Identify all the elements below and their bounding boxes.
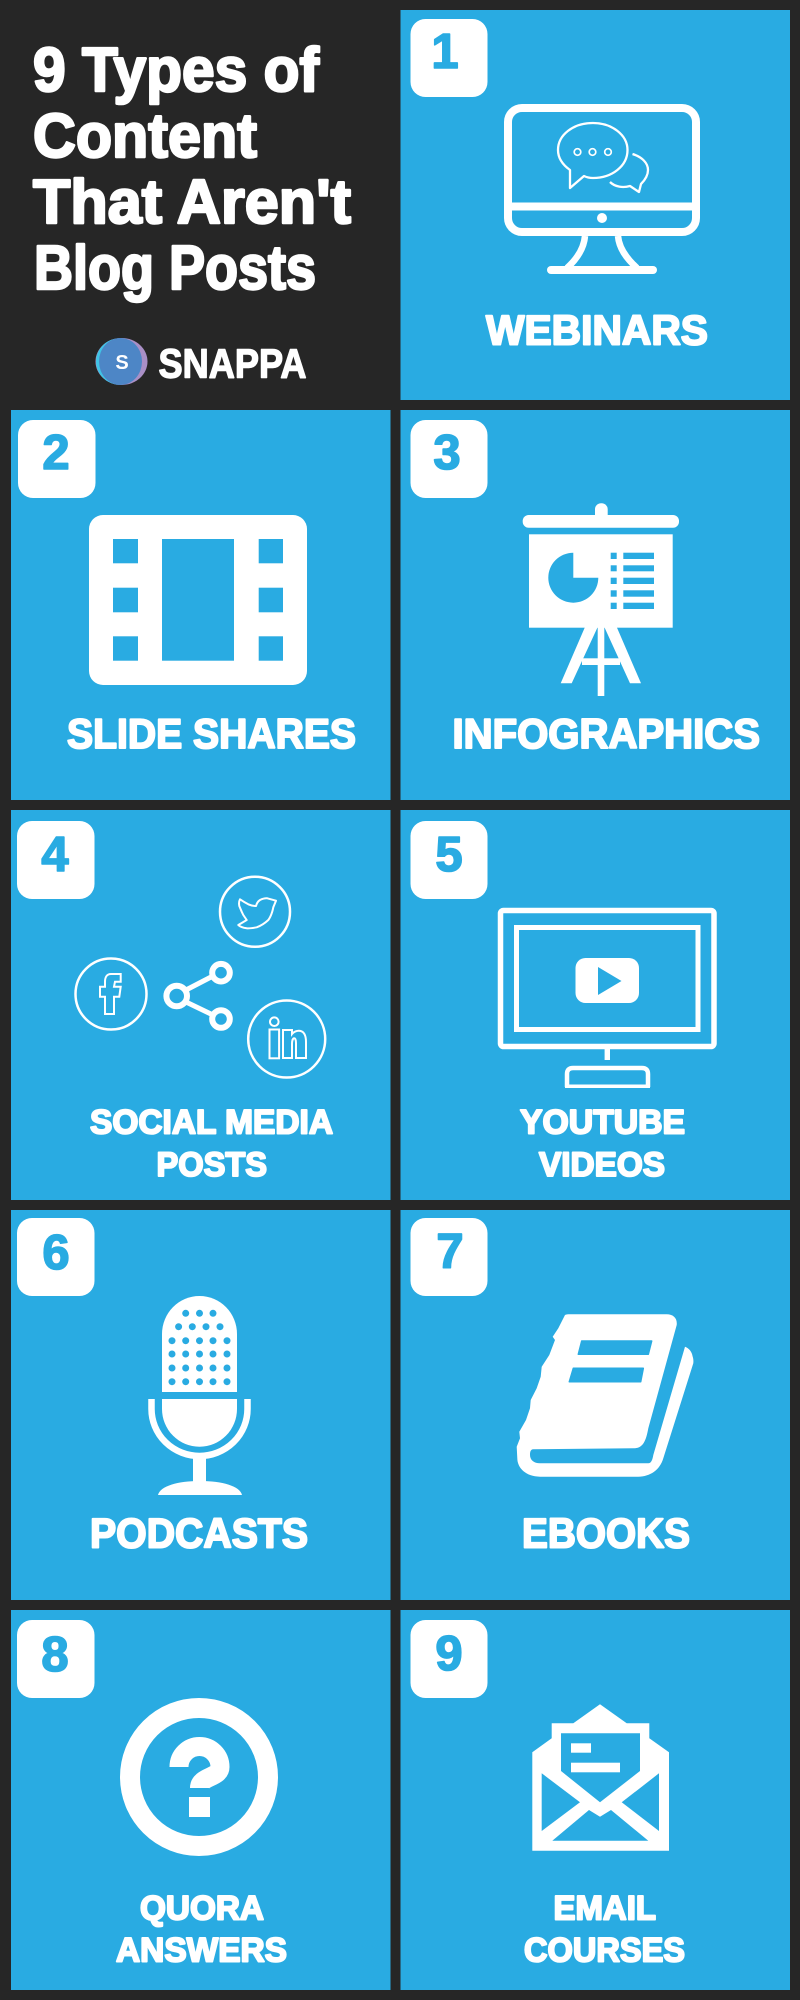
label: email courses (524, 1890, 685, 1970)
icon: facebook circle (76, 958, 146, 1030)
label: quora answers: ANSWERS (116, 1932, 287, 1970)
label: slide shares: SLIDE SHARES (67, 710, 356, 757)
label: email courses: COURSES (524, 1932, 685, 1970)
badge: 5: 5 (435, 828, 463, 882)
label: quora answers (116, 1890, 287, 1970)
badge: 2: 2 (42, 426, 70, 480)
label: youtube videos: YOUTUBE (520, 1104, 685, 1142)
icon: question mark circle (130, 1708, 268, 1846)
label: youtube videos (520, 1104, 685, 1184)
label: email courses: EMAIL (554, 1890, 656, 1928)
badge: 5 (410, 821, 488, 899)
badge: 8 (17, 1620, 94, 1698)
badge: 1: 1 (431, 25, 459, 79)
icon: share nodes (166, 964, 230, 1028)
icon: linkedin circle (248, 1000, 325, 1078)
panel: youtube videos (400, 810, 790, 1200)
title: That Aren't (33, 168, 351, 237)
label: infographics: INFOGRAPHICS (452, 710, 760, 757)
icon: open envelope (532, 1704, 669, 1851)
title: Blog Posts (34, 234, 316, 303)
title: 9 Types of (33, 36, 319, 105)
logo: snappa: S (115, 352, 129, 374)
badge: 8: 8 (41, 1628, 69, 1682)
badge: 6: 6 (42, 1226, 70, 1280)
badge: 4 (17, 821, 94, 899)
label: social media posts: POSTS (156, 1146, 267, 1184)
icon: twitter circle (220, 877, 290, 947)
panel: infographics (400, 410, 790, 800)
panel: quora answers (11, 1610, 390, 1990)
badge: 3: 3 (433, 426, 461, 480)
label: social media posts: SOCIAL MEDIA (90, 1104, 333, 1142)
badge: 6 (17, 1218, 94, 1296)
panel: social media posts (11, 810, 390, 1200)
badge: 2 (18, 420, 96, 498)
badge: 4: 4 (41, 828, 69, 882)
icon: book (517, 1314, 693, 1477)
icon: presentation board (523, 503, 679, 696)
label: youtube videos: VIDEOS (539, 1146, 665, 1184)
panel: webinars (400, 10, 790, 400)
title (33, 36, 351, 303)
badge: 3 (410, 420, 488, 498)
badge: 7: 7 (436, 1225, 464, 1279)
icon: monitor with chat bubbles (508, 108, 696, 274)
panel: slide shares (11, 410, 390, 800)
label: ebooks: EBOOKS (522, 1510, 690, 1556)
logo: snappa (96, 338, 306, 386)
icon: microphone (152, 1296, 248, 1495)
label: quora answers: QUORA (140, 1890, 264, 1928)
label: social media posts (90, 1104, 333, 1184)
panel: email courses (400, 1610, 790, 1990)
panel: podcasts (11, 1210, 390, 1600)
logo: snappa: SNAPPA (158, 340, 306, 386)
icon: film strip (89, 515, 307, 685)
badge: 7 (410, 1218, 488, 1296)
badge: 9: 9 (435, 1627, 463, 1681)
label: podcasts: PODCASTS (90, 1510, 308, 1556)
title: Content (33, 102, 257, 171)
label: webinars: WEBINARS (486, 306, 708, 354)
icon: screen with play button (500, 910, 714, 1088)
badge: 1 (410, 19, 488, 97)
panel: ebooks (400, 1210, 790, 1600)
badge: 9 (410, 1620, 488, 1698)
